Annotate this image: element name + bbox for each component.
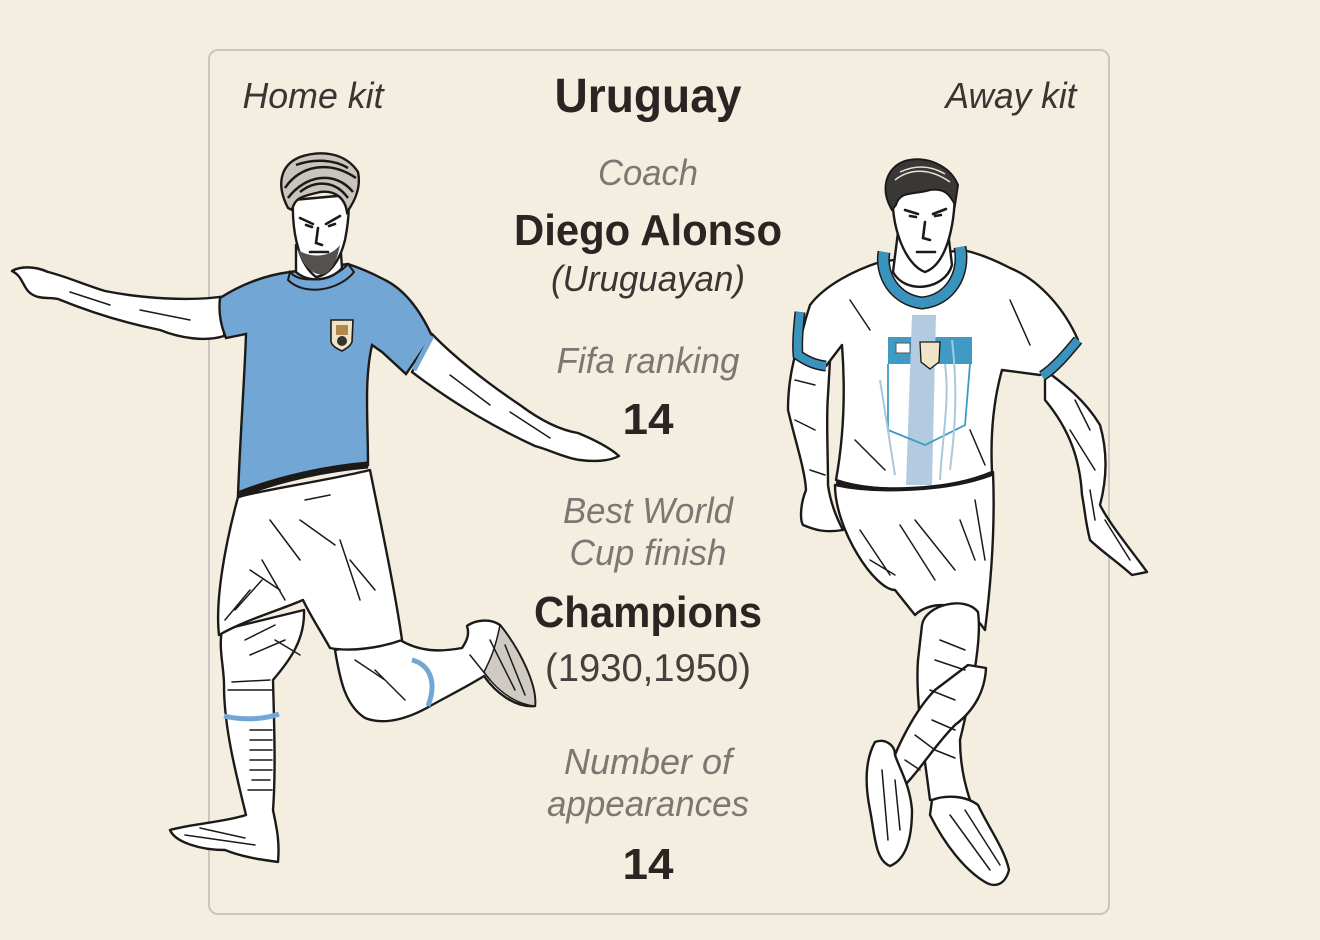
shirt hem shadow xyxy=(836,474,992,489)
sleeve cuffs and sock band xyxy=(224,336,432,719)
text block: best world cup finish: Best World xyxy=(563,490,734,531)
hair xyxy=(281,153,359,212)
neck xyxy=(893,232,952,287)
face lines xyxy=(300,216,340,252)
text block: number of appearances: 14 xyxy=(622,840,674,889)
near leg xyxy=(917,603,979,800)
shorts xyxy=(835,472,994,630)
near boot xyxy=(930,797,1009,885)
text block: coach: (Uruguayan) xyxy=(551,258,745,299)
title: Uruguay xyxy=(554,70,742,123)
text block: coach: Coach xyxy=(598,152,698,193)
back leg and boot xyxy=(335,621,535,721)
right arm xyxy=(412,334,619,461)
neck xyxy=(296,240,342,279)
hatching xyxy=(70,292,550,845)
jersey xyxy=(219,264,432,495)
collar xyxy=(288,264,354,290)
text block: fifa ranking: 14 xyxy=(622,395,674,444)
illustration: away kit player xyxy=(788,159,1147,885)
right arm xyxy=(1045,370,1147,575)
hatching xyxy=(795,300,1130,870)
beard xyxy=(298,245,340,275)
text block: fifa ranking xyxy=(556,340,740,444)
boot sole detail xyxy=(484,625,535,706)
illustration: home kit player xyxy=(12,153,619,862)
label: home kit: Home kit xyxy=(242,75,385,116)
label: away kit: Away kit xyxy=(944,75,1078,116)
far leg xyxy=(890,665,986,785)
shorts xyxy=(218,470,402,650)
far boot xyxy=(867,741,912,866)
hair xyxy=(886,159,958,210)
standing leg xyxy=(170,610,304,862)
text block: best world cup finish: Champions xyxy=(534,588,762,637)
left arm xyxy=(788,320,843,531)
text block: best world cup finish xyxy=(534,490,762,690)
shirt hem shadow xyxy=(238,465,368,495)
text block: best world cup finish: Cup finish xyxy=(570,532,726,573)
sleeve cuffs xyxy=(798,312,1078,376)
text block: number of appearances xyxy=(547,741,749,889)
left arm xyxy=(12,267,226,339)
sleeve cuff colour xyxy=(798,312,1078,376)
text block: number of appearances: appearances xyxy=(547,783,749,824)
head xyxy=(293,195,349,277)
panel: card frame xyxy=(209,50,1109,914)
collar xyxy=(883,247,961,303)
jersey xyxy=(798,250,1078,489)
chest band and stripes xyxy=(880,315,972,485)
face lines xyxy=(905,209,946,252)
head xyxy=(893,178,955,272)
collar outline xyxy=(883,247,961,303)
text block: best world cup finish: (1930,1950) xyxy=(545,647,751,690)
text block: coach xyxy=(514,152,782,299)
text block: fifa ranking: Fifa ranking xyxy=(556,340,740,381)
text block: number of appearances: Number of xyxy=(564,741,736,782)
crest xyxy=(331,320,353,351)
text block: coach: Diego Alonso xyxy=(514,206,782,255)
